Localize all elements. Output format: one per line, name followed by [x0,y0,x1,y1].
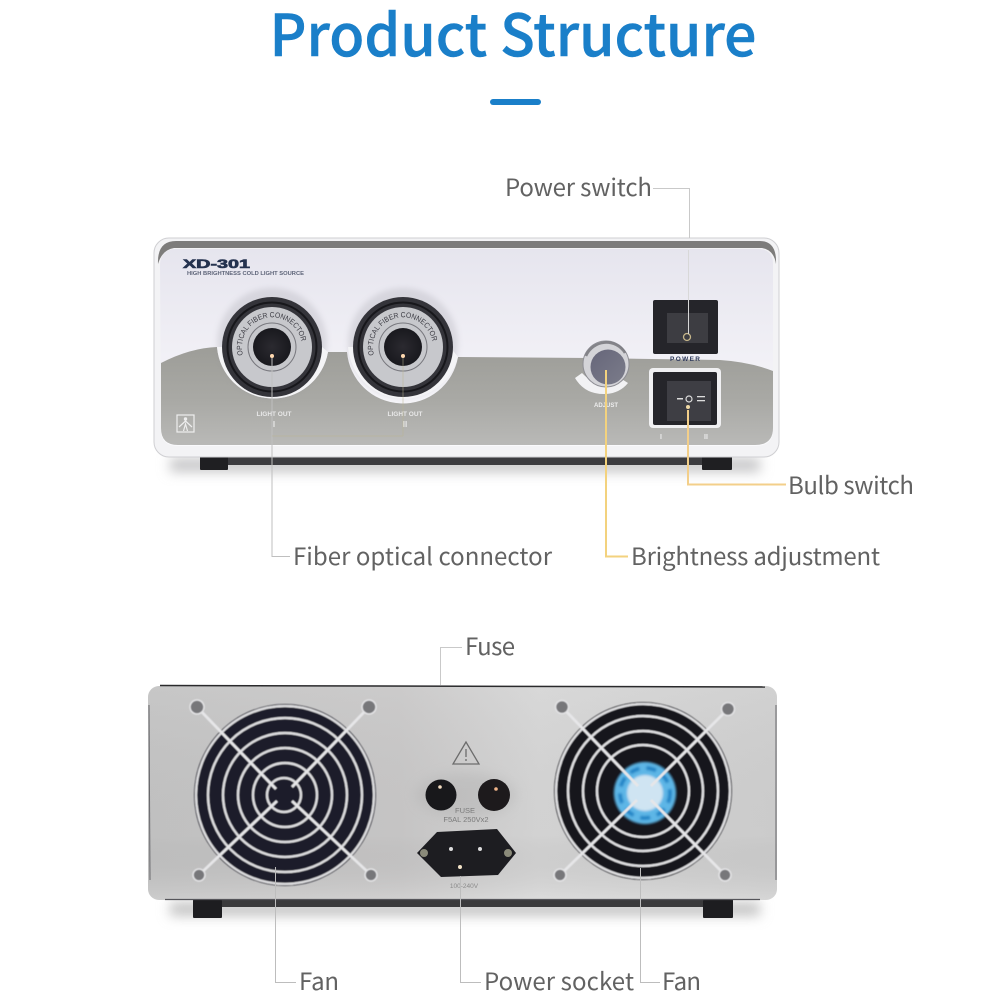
callout: power switch [505,168,690,334]
light out labels [256,411,423,429]
brand logo: HIGH BRIGHTNESS COLD LIGHT SOURCE [187,271,305,277]
warning triangle [453,742,479,764]
brightness knob: ADJUST [594,403,618,409]
right fan [554,700,734,881]
brand logo: XD-301 [183,259,251,271]
callout: bulb switch: Bulb switch [788,466,914,501]
light out labels: LIGHT OUT [387,411,423,418]
title underline [490,99,541,105]
light out labels: I [273,420,275,429]
callout: power socket: Power socket [484,962,634,997]
power socket: 100-240V [450,883,479,890]
callout: left fan: Fan [299,962,339,997]
icon: patient symbol [177,415,194,432]
connector I: OPTICAL FIBER CONNECTOR [236,312,306,356]
left fan [190,700,377,886]
power socket [417,829,516,890]
brand logo [183,259,305,277]
callout: power socket [460,876,634,997]
bulb rocker switch: II [704,434,708,441]
callout: power switch: Power switch [505,168,652,203]
fuse holders [416,773,516,817]
fuse text: F5AL 250Vx2 [443,815,489,824]
panel: rear view of device [148,686,777,918]
callout: fiber optical connector: Fiber optical connector [293,537,553,572]
fuse text [443,806,489,824]
connector II: OPTICAL FIBER CONNECTOR [368,312,437,356]
panel: front view of device [154,238,780,478]
connector I [216,288,328,398]
callout: brightness adjustment: Brightness adjustment [631,537,880,572]
light out labels: LIGHT OUT [256,411,292,418]
callout: right fan: Fan [662,962,701,997]
power rocker switch [653,300,718,363]
front shadow and base [170,454,760,472]
brightness knob [575,341,629,409]
connector II [347,288,459,399]
callout: fuse [440,627,515,685]
bulb rocker switch [649,368,721,441]
rear shadow and feet [170,898,760,918]
fuse text: FUSE [455,806,475,815]
power rocker switch: POWER [670,356,700,363]
callout: bulb switch [688,410,914,501]
grey lower band [161,347,773,445]
bulb rocker switch: I [660,434,662,441]
light out labels: II [403,420,407,429]
callout: fiber optical connector [272,358,553,572]
callout: fuse: Fuse [465,627,515,662]
front casing [154,238,779,457]
callout: brightness adjustment [606,370,880,572]
rear casing [148,686,777,900]
callout: right fan [640,868,701,997]
callout: left fan [276,867,339,997]
